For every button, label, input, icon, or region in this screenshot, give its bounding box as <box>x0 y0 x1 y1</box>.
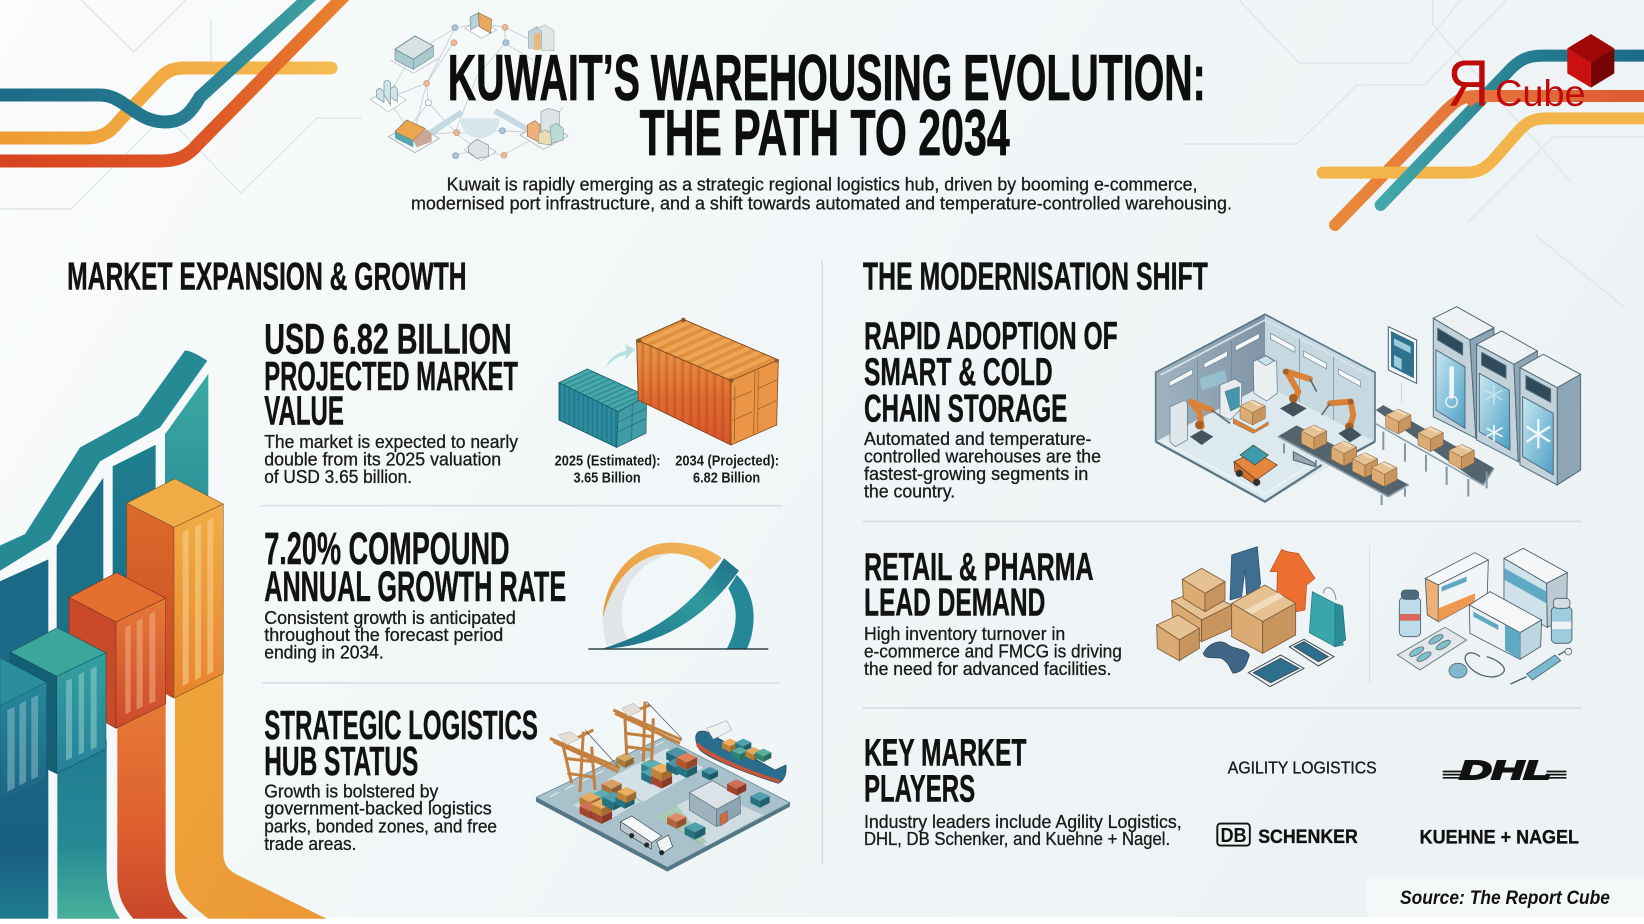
heading: key market players: PLAYERS <box>864 768 975 810</box>
text: logistics hub body: Growth is bolstered by <box>264 780 439 801</box>
text: CAGR body: throughout the forecast period <box>264 624 503 645</box>
stat: market value heading: PROJECTED MARKET <box>264 353 518 399</box>
heading: smart and cold chain: CHAIN STORAGE <box>864 386 1067 430</box>
caption: 2034 projected: 6.82 Billion <box>693 469 760 486</box>
logo: DHL <box>1443 755 1566 785</box>
text: smart and cold chain body: Automated and temperature- <box>864 428 1091 449</box>
snowflakes <box>1485 385 1550 448</box>
icon: retail goods <box>1157 545 1572 687</box>
text: retail and pharma body: the need for advanced facilities. <box>864 658 1111 679</box>
heading: retail and pharma: LEAD DEMAND <box>864 580 1045 624</box>
text: logistics hub body: parks, bonded zones, and free <box>264 816 497 837</box>
stat: market value heading <box>264 315 518 434</box>
phone <box>1289 639 1334 666</box>
subtitle: modernised port infrastructure, and a shift towards automated and temperature-controlled warehousing. <box>411 193 1232 214</box>
heading: retail and pharma: RETAIL & PHARMA <box>864 545 1094 589</box>
logo wordmark <box>1447 46 1586 120</box>
cold storage units <box>1433 307 1581 485</box>
cranes <box>550 702 682 792</box>
screen panel <box>1388 327 1417 383</box>
text: smart and cold chain body: fastest-growing segments in <box>864 463 1088 484</box>
text: key market players body: DHL, DB Schenker, and Kuehne + Nagel. <box>864 828 1170 849</box>
text: market value body: of USD 3.65 billion. <box>264 466 412 487</box>
subtitle: Kuwait is rapidly emerging as a strategic regional logistics hub, driven by booming e-commerce, <box>447 173 1197 194</box>
pharma boxes <box>1425 548 1567 659</box>
text: CAGR body: Consistent growth is anticipated <box>264 607 516 628</box>
warehouse room <box>1156 314 1375 502</box>
bar: yellow box <box>127 479 223 698</box>
bar: red box <box>69 573 166 728</box>
text: smart and cold chain body: the country. <box>864 481 955 502</box>
container stacks <box>580 747 697 824</box>
text: CAGR body <box>264 607 516 662</box>
thermometer <box>1445 368 1459 397</box>
text: market value body <box>264 431 518 487</box>
subtitle <box>411 173 1232 214</box>
warehouse building <box>689 781 741 827</box>
icon: shipping containers <box>559 318 779 447</box>
stat: CAGR heading: 7.20% COMPOUND <box>264 523 510 574</box>
icon: warehouse network <box>370 13 568 161</box>
text: smart and cold chain body <box>864 428 1101 502</box>
icon: growth gauge <box>588 543 768 650</box>
text: retail and pharma body <box>864 623 1122 679</box>
panel: the modernisation shift <box>863 254 1581 849</box>
logo: Kuehne + Nagel: KUEHNE + NAGEL <box>1420 827 1579 849</box>
text: key market players body <box>864 811 1182 849</box>
logo wordmark: Cube <box>1495 72 1586 114</box>
text: smart and cold chain body: controlled warehouses are the <box>864 445 1101 466</box>
heading: market expansion: MARKET EXPANSION & GROWTH <box>67 254 467 298</box>
shopping bag <box>1309 588 1346 647</box>
logo: Agility Logistics: AGILITY LOGISTICS <box>1228 757 1377 777</box>
logo: DB Schenker: DB <box>1220 825 1247 847</box>
tablet <box>1248 655 1304 687</box>
text: market value body: double from its 2025 valuation <box>264 449 501 470</box>
port platform <box>536 737 790 872</box>
bar: teal box <box>10 628 106 774</box>
blister pack <box>1397 627 1467 670</box>
caption: 2034 projected <box>675 453 779 486</box>
text: retail and pharma body: e-commerce and FMCG is driving <box>864 640 1122 661</box>
vertical column divider <box>822 260 823 864</box>
jeans <box>1230 547 1261 600</box>
heading: key market players: KEY MARKET <box>864 731 1026 773</box>
text: logistics hub body <box>264 780 497 854</box>
small container <box>559 369 647 447</box>
stat: CAGR heading: ANNUAL GROWTH RATE <box>264 563 566 611</box>
stat: CAGR heading <box>264 523 566 611</box>
bar: front box <box>0 658 47 802</box>
pill and tube <box>1449 653 1504 678</box>
stat: market value heading: VALUE <box>264 388 344 434</box>
vials <box>1399 590 1572 643</box>
stat: logistics hub heading: HUB STATUS <box>264 738 418 784</box>
text: logistics hub body: trade areas. <box>264 833 356 854</box>
text: CAGR body: ending in 2034. <box>264 641 384 662</box>
caption: 2025 estimated <box>555 453 661 486</box>
gamepad <box>1203 642 1249 673</box>
ship <box>696 721 786 783</box>
text: market value body: The market is expected to nearly <box>264 431 518 452</box>
text: key market players body: Industry leaders include Agility Logistics, <box>864 811 1182 832</box>
syringe <box>1511 648 1572 684</box>
forklift <box>1234 445 1277 486</box>
top-left ribbons <box>0 0 345 161</box>
heading: key market players <box>864 731 1026 810</box>
stat: logistics hub heading: STRATEGIC LOGISTICS <box>264 702 538 748</box>
title <box>448 41 1206 169</box>
caption: 2034 projected: 2034 (Projected): <box>675 453 779 470</box>
icon: port and logistics hub <box>536 702 790 872</box>
arrow: growth <box>605 344 635 368</box>
conveyor belts <box>1278 406 1494 505</box>
logo: RCube <box>1447 34 1614 120</box>
chart: rising bars and trend ribbon <box>0 351 327 919</box>
logo: DB Schenker: SCHENKER <box>1258 826 1358 848</box>
heading: smart and cold chain: SMART & COLD <box>864 350 1053 394</box>
truck <box>621 816 673 855</box>
t-shirt <box>1270 549 1315 612</box>
logo mark: cube <box>1567 34 1614 88</box>
source note: Source: The Report Cube <box>1400 888 1610 909</box>
source note <box>1367 879 1644 917</box>
large container <box>637 319 778 445</box>
stat: logistics hub heading <box>264 702 538 784</box>
robot arms <box>1191 372 1353 432</box>
heading: smart and cold chain <box>864 314 1118 430</box>
top-right ribbons <box>1323 56 1644 225</box>
stat: market value heading: USD 6.82 BILLION <box>264 315 512 363</box>
logo: DHL: DHL <box>1460 755 1551 785</box>
title: THE PATH TO 2034 <box>640 96 1010 169</box>
logo: DB Schenker <box>1217 824 1358 848</box>
heading: modernisation: THE MODERNISATION SHIFT <box>863 254 1208 298</box>
heading: smart and cold chain: RAPID ADOPTION OF <box>864 314 1118 358</box>
cardboard boxes <box>1157 568 1296 661</box>
machines <box>1170 355 1277 447</box>
text: logistics hub body: government-backed logistics <box>264 798 492 819</box>
panel: market expansion and growth <box>67 254 781 854</box>
icon: smart cold-chain warehouse <box>1156 307 1581 505</box>
caption: 2025 estimated: 2025 (Estimated): <box>555 453 661 470</box>
agv with box <box>1233 400 1268 433</box>
text: retail and pharma body: High inventory turnover in <box>864 623 1065 644</box>
heading: retail and pharma <box>864 545 1094 624</box>
caption: 2025 estimated: 3.65 Billion <box>574 469 641 486</box>
logo wordmark: Я <box>1447 46 1489 120</box>
